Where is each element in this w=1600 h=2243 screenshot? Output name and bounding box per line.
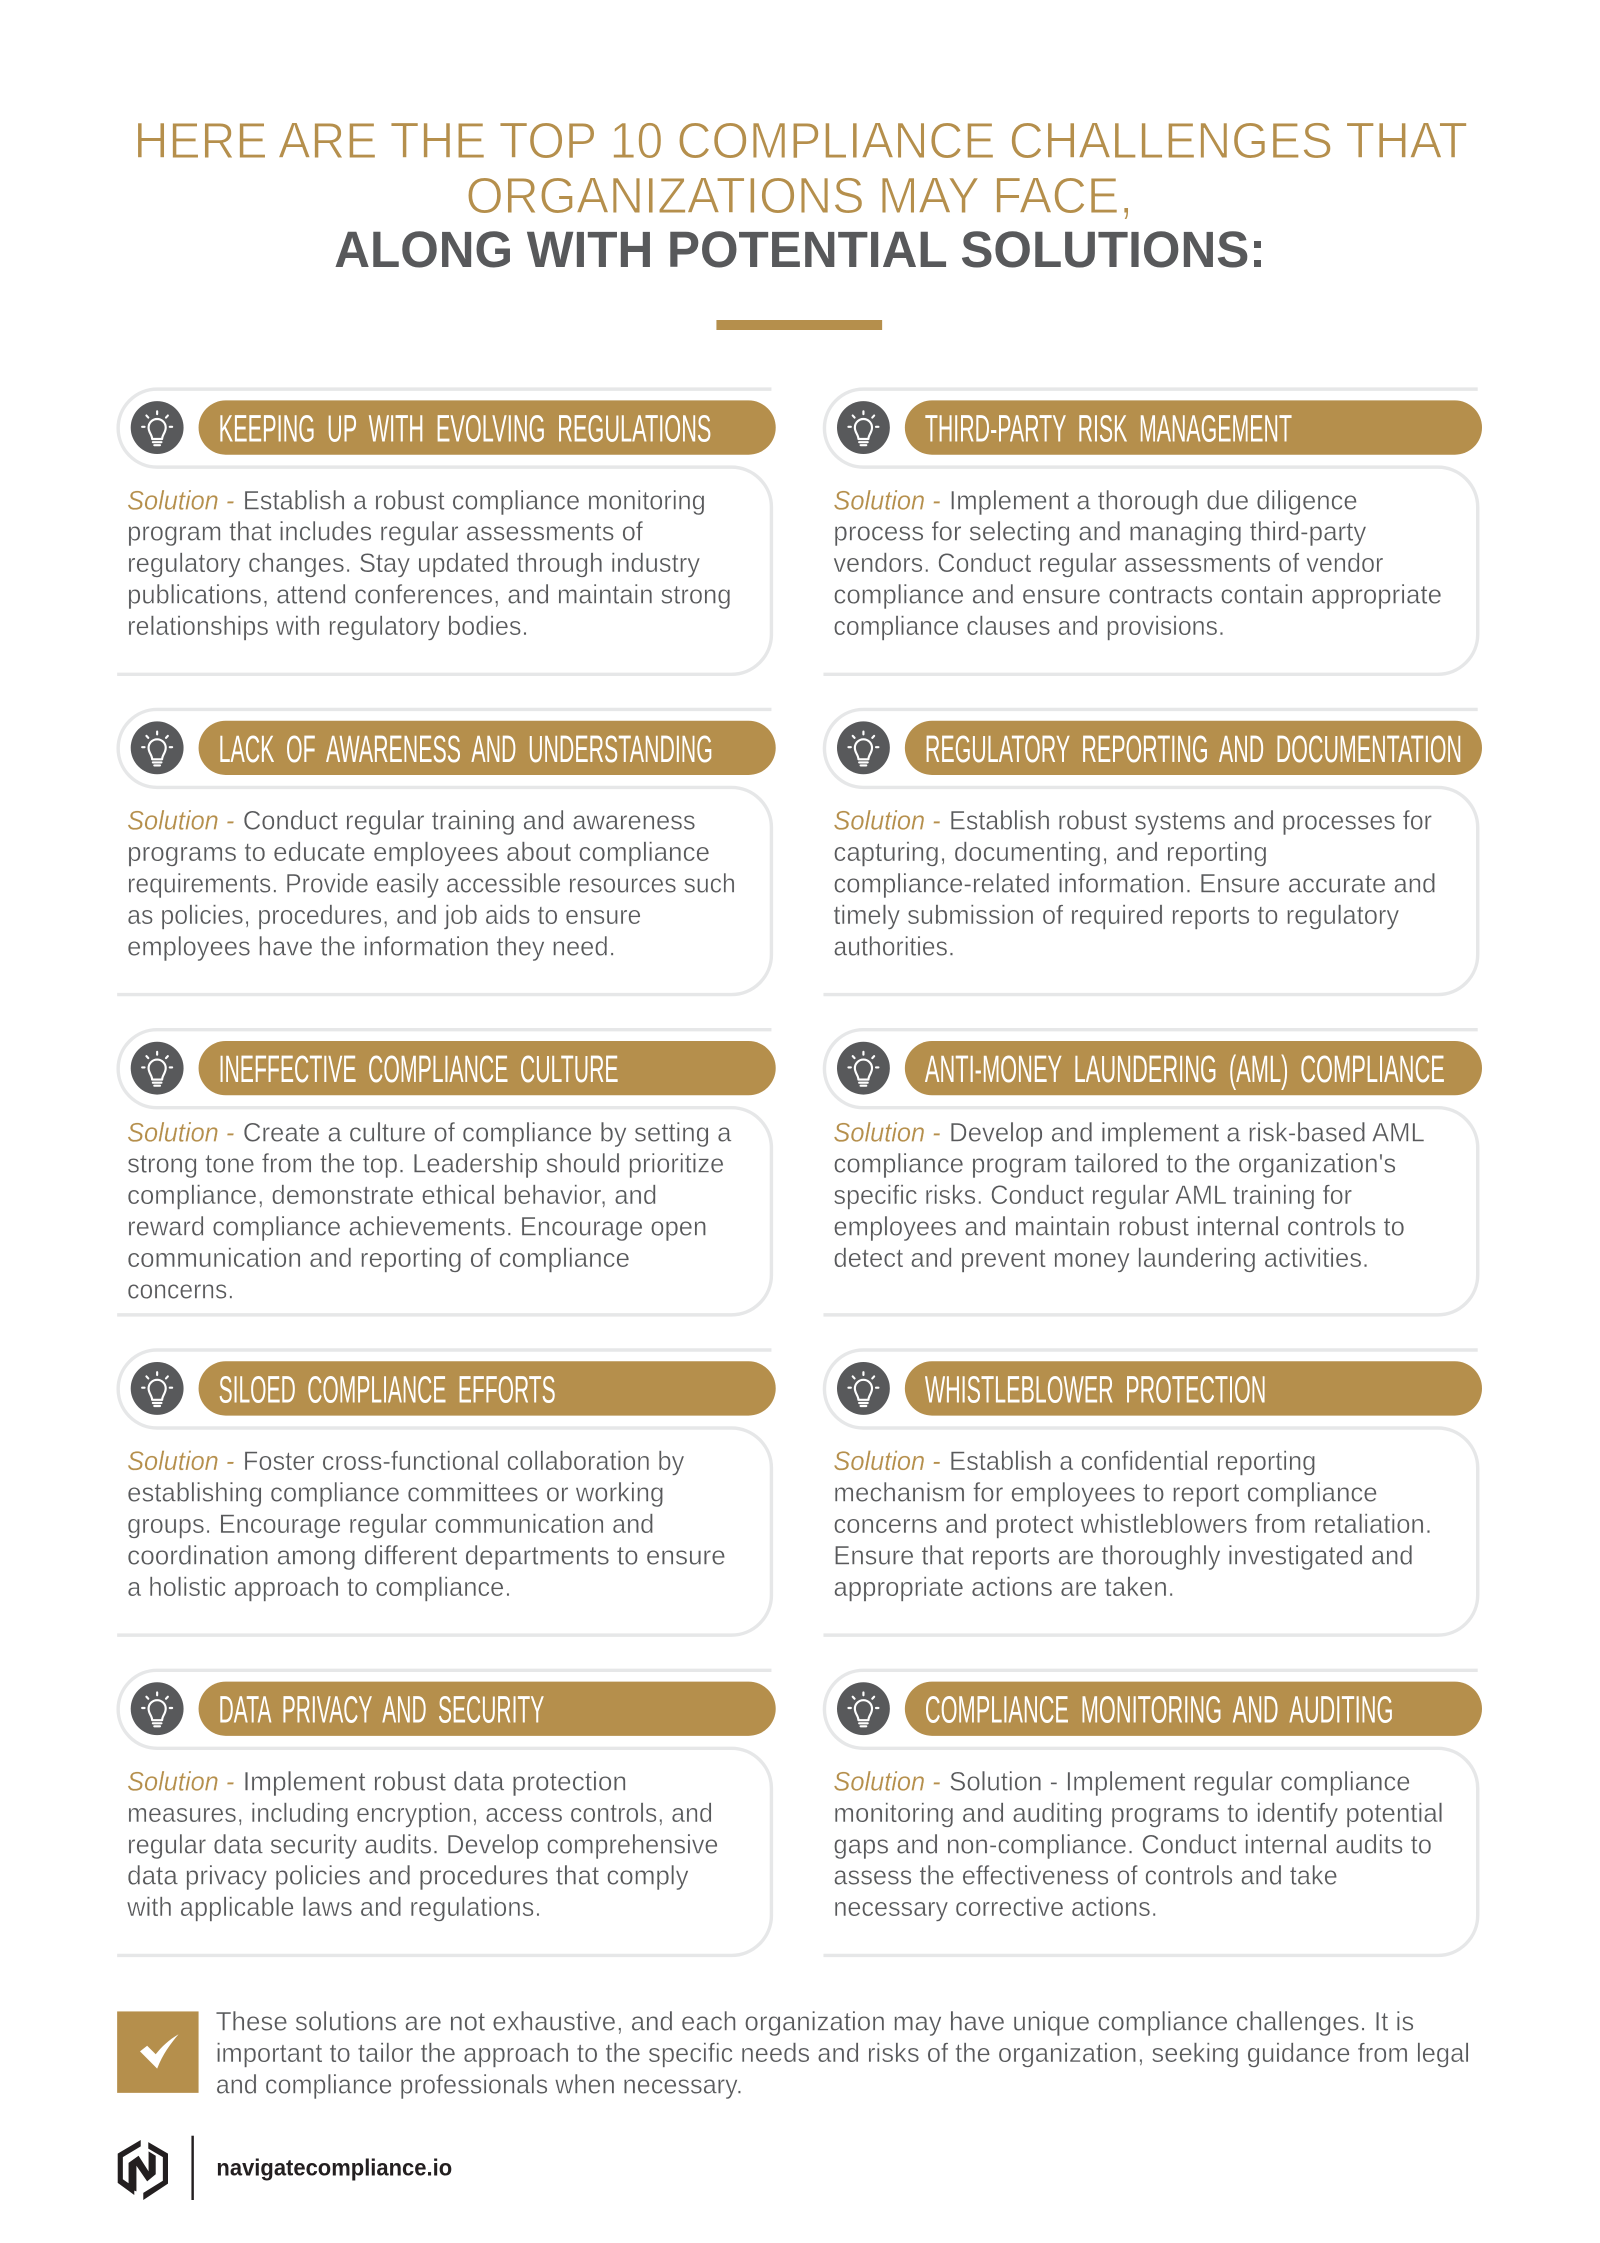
panel: third-party risk management: Implement a thorough due diligence (949, 485, 1358, 515)
panel: data privacy and security: measures, including encryption, access controls, and (127, 1798, 713, 1828)
panel: lack of awareness and understanding: LACK OF AWARENESS AND UNDERSTANDING (219, 729, 713, 771)
icon: check box (117, 2011, 199, 2093)
panel: third-party risk management: compliance clauses and provisions. (833, 611, 1225, 641)
panel: data privacy and security: regular data security audits. Develop comprehensive (127, 1829, 719, 1859)
panel: keeping up with evolving regulations (117, 389, 776, 674)
closing note: important to tailor the approach to the specific needs and risks of the organization, seeking guidance from legal (216, 2038, 1470, 2068)
panel: keeping up with evolving regulations: relationships with regulatory bodies. (127, 611, 529, 641)
panel: third-party risk management: process for selecting and managing third-party (833, 517, 1367, 547)
panel: anti-money laundering compliance: detect and prevent money laundering activities. (833, 1243, 1369, 1273)
panel: whistleblower protection: Ensure that reports are thoroughly investigated and (833, 1540, 1413, 1570)
panel: siloed compliance efforts: a holistic approach to compliance. (127, 1572, 511, 1602)
panel: compliance monitoring and auditing: monitoring and auditing programs to identify potential (833, 1798, 1443, 1828)
panel: compliance monitoring and auditing: assess the effectiveness of controls and take (833, 1861, 1338, 1891)
panel: ineffective compliance culture: Create a culture of compliance by setting a (243, 1117, 732, 1147)
panel: ineffective compliance culture: reward compliance achievements. Encourage open (127, 1212, 707, 1242)
panel: compliance monitoring and auditing: Solution - Implement regular compliance (949, 1766, 1411, 1796)
panel: compliance monitoring and auditing: Solution - (833, 1766, 941, 1796)
panel: ineffective compliance culture: compliance, demonstrate ethical behavior, and (127, 1180, 657, 1210)
panel: third-party risk management (823, 389, 1482, 674)
closing note: These solutions are not exhaustive, and each organization may have unique compliance challenges. It is (216, 2007, 1414, 2037)
panel: anti-money laundering compliance: Develop and implement a risk-based AML (949, 1117, 1425, 1147)
panel: anti-money laundering compliance: employees and maintain robust internal controls to (833, 1212, 1405, 1242)
panel: ineffective compliance culture: strong tone from the top. Leadership should prioritize (127, 1149, 724, 1179)
panel: whistleblower protection: WHISTLEBLOWER PROTECTION (925, 1369, 1266, 1411)
panel: siloed compliance efforts: groups. Encourage regular communication and (127, 1509, 654, 1539)
title: ALONG WITH POTENTIAL SOLUTIONS: (334, 221, 1266, 278)
panel: lack of awareness and understanding: employees have the information they need. (127, 931, 616, 961)
panel: regulatory reporting and documentation: authorities. (833, 931, 955, 961)
panel: lack of awareness and understanding: programs to educate employees about compliance (127, 837, 710, 867)
panel: anti-money laundering compliance (823, 1030, 1482, 1315)
panel: siloed compliance efforts: Foster cross-functional collaboration by (243, 1446, 685, 1476)
panel: siloed compliance efforts: SILOED COMPLIANCE EFFORTS (219, 1369, 556, 1411)
panel: data privacy and security: data privacy policies and procedures that comply (127, 1861, 689, 1891)
panel: data privacy and security: with applicable laws and regulations. (126, 1892, 541, 1922)
panel: third-party risk management: THIRD-PARTY RISK MANAGEMENT (925, 409, 1292, 451)
panel: data privacy and security (117, 1670, 776, 1955)
panel: data privacy and security: Solution - (127, 1766, 234, 1796)
panel: data privacy and security: DATA PRIVACY AND SECURITY (219, 1690, 544, 1732)
panel: compliance monitoring and auditing: gaps and non-compliance. Conduct internal audits to (833, 1829, 1432, 1859)
panel: keeping up with evolving regulations: publications, attend conferences, and maintain strong (127, 580, 731, 610)
panel: regulatory reporting and documentation: timely submission of required reports to regulatory (833, 900, 1400, 930)
panel: lack of awareness and understanding: Solution - (127, 806, 234, 836)
panel: whistleblower protection: Establish a confidential reporting (949, 1446, 1316, 1476)
panel: ineffective compliance culture: INEFFECTIVE COMPLIANCE CULTURE (219, 1049, 619, 1091)
title: ORGANIZATIONS MAY FACE, (466, 167, 1133, 224)
panel: anti-money laundering compliance: specific risks. Conduct regular AML training for (833, 1180, 1352, 1210)
panel: compliance monitoring and auditing: necessary corrective actions. (833, 1892, 1158, 1922)
panel: data privacy and security: Implement robust data protection (243, 1766, 627, 1796)
panel: lack of awareness and understanding: as policies, procedures, and job aids to ensure (127, 900, 641, 930)
panel: lack of awareness and understanding: Conduct regular training and awareness (243, 806, 696, 836)
panel: keeping up with evolving regulations: Establish a robust compliance monitoring (243, 485, 706, 515)
icon: navigate compliance logo (118, 2140, 168, 2200)
panel: keeping up with evolving regulations: regulatory changes. Stay updated through industry (127, 548, 701, 578)
panel: anti-money laundering compliance: compliance program tailored to the organization's (833, 1149, 1396, 1179)
panel: regulatory reporting and documentation: compliance-related information. Ensure accurate and (833, 868, 1436, 898)
panel: regulatory reporting and documentation (823, 709, 1482, 995)
panel: siloed compliance efforts: coordination among different departments to ensure (127, 1540, 726, 1570)
panel: lack of awareness and understanding: requirements. Provide easily accessible resources such (127, 868, 736, 898)
panel: whistleblower protection: appropriate actions are taken. (833, 1572, 1175, 1602)
panel: ineffective compliance culture (117, 1030, 776, 1315)
title (134, 112, 1468, 278)
panel: ineffective compliance culture: concerns. (127, 1274, 234, 1304)
panel: ineffective compliance culture: Solution - (127, 1117, 234, 1147)
panel: regulatory reporting and documentation: Solution - (833, 806, 941, 836)
panel: compliance monitoring and auditing (823, 1670, 1482, 1955)
panel: whistleblower protection: Solution - (833, 1446, 941, 1476)
panel: ineffective compliance culture: communication and reporting of compliance (127, 1243, 630, 1273)
closing note: and compliance professionals when necessary. (216, 2070, 743, 2100)
logo divider (191, 2136, 194, 2200)
panel: keeping up with evolving regulations: Solution - (127, 485, 234, 515)
panel: keeping up with evolving regulations: KEEPING UP WITH EVOLVING REGULATIONS (219, 409, 711, 451)
closing note (216, 2007, 1470, 2100)
panel: anti-money laundering compliance: Solution - (833, 1117, 941, 1147)
panel: whistleblower protection: mechanism for employees to report compliance (833, 1478, 1378, 1508)
panel: lack of awareness and understanding (117, 709, 776, 995)
panel: siloed compliance efforts: Solution - (127, 1446, 234, 1476)
panel: third-party risk management: compliance and ensure contracts contain appropriate (833, 580, 1442, 610)
panel: keeping up with evolving regulations: program that includes regular assessments of (127, 517, 643, 547)
panel: whistleblower protection (823, 1350, 1482, 1635)
panel: third-party risk management: vendors. Conduct regular assessments of vendor (833, 548, 1384, 578)
title: HERE ARE THE TOP 10 COMPLIANCE CHALLENGES THAT (134, 112, 1468, 169)
title divider (716, 320, 882, 330)
panel: siloed compliance efforts (117, 1350, 776, 1635)
panel: regulatory reporting and documentation: Establish robust systems and processes for (949, 806, 1432, 836)
panel: third-party risk management: Solution - (833, 485, 941, 515)
panel: whistleblower protection: concerns and protect whistleblowers from retaliation. (833, 1509, 1432, 1539)
panel: siloed compliance efforts: establishing compliance committees or working (127, 1478, 664, 1508)
panel: regulatory reporting and documentation: capturing, documenting, and reporting (833, 837, 1268, 867)
website: navigatecompliance.io (216, 2155, 452, 2181)
